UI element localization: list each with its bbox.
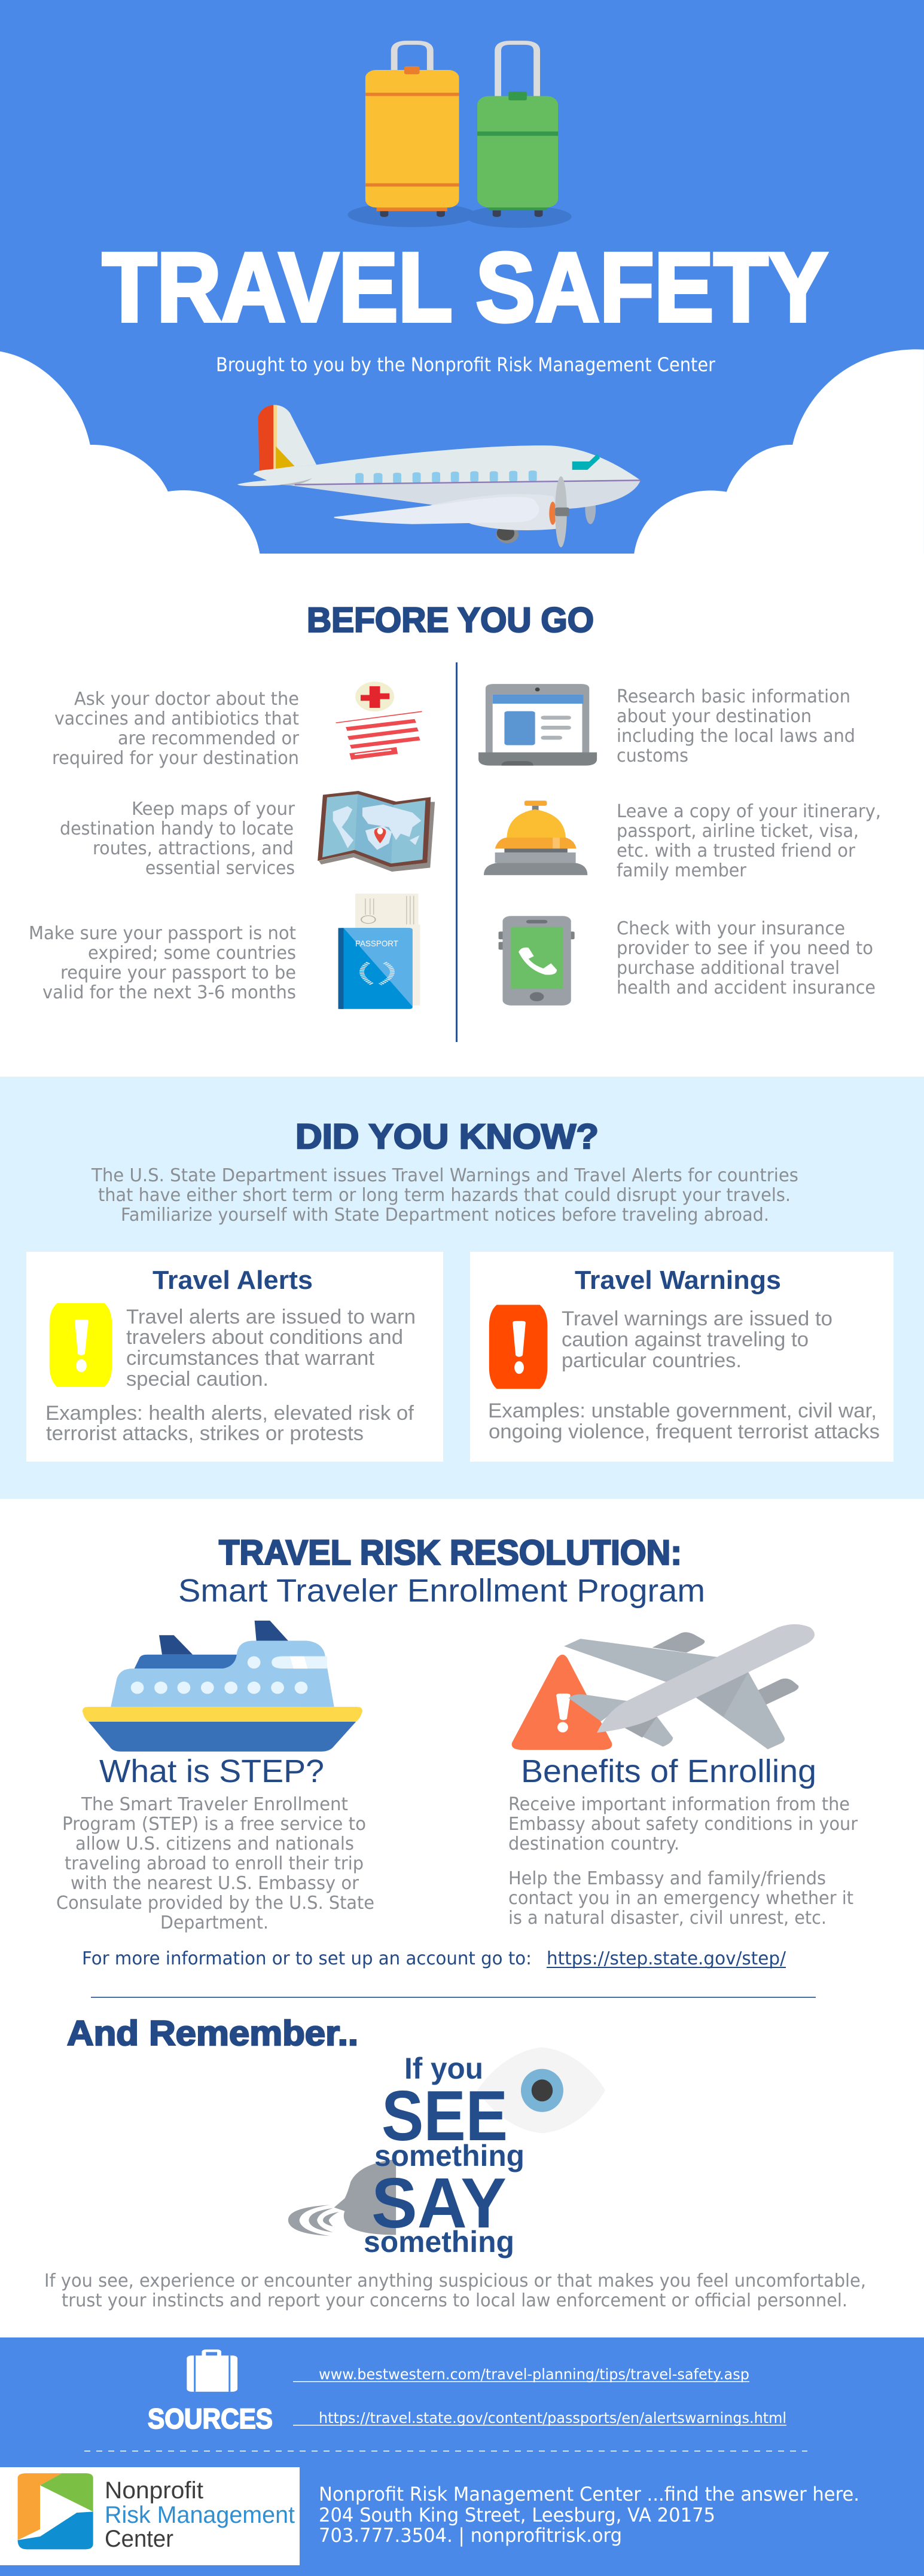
- icon: logo mark: [18, 2473, 93, 2549]
- icon: orange warning: [489, 1305, 547, 1389]
- text: passport validity: valid for the next 3-6 months: [42, 982, 296, 1003]
- slogan: SAY: [371, 2164, 507, 2243]
- slogan: [364, 2052, 524, 2259]
- text: keep maps: routes, attractions, and: [93, 838, 294, 859]
- text: passport validity: require your passport to be: [60, 962, 296, 983]
- text: benefits description: destination country.: [508, 1834, 679, 1854]
- sources heading: SOURCES: [148, 2403, 273, 2434]
- text: benefits description: is a natural disaster, civil unrest, etc.: [508, 1908, 827, 1929]
- warning examples: Examples: unstable government, civil war,: [488, 1399, 877, 1422]
- slogan: something: [374, 2139, 524, 2172]
- text: keep maps: Keep maps of your: [132, 799, 295, 820]
- intro text: Familiarize yourself with State Department notices before traveling abroad.: [121, 1205, 769, 1226]
- intro text: [91, 1165, 798, 1226]
- text: insurance: provider to see if you need to: [617, 938, 873, 959]
- logo wordmark: Nonprofit: [105, 2477, 203, 2504]
- text: research: customs: [617, 745, 688, 766]
- icon: medical record: [336, 682, 422, 760]
- slogan: something: [364, 2225, 514, 2259]
- alert description: special caution.: [126, 1368, 269, 1391]
- title: TRAVEL SAFETY: [102, 233, 828, 342]
- panel: travel risk resolution: [56, 1533, 858, 1998]
- panel: footer: [0, 2337, 924, 2576]
- icon: speaking head: [288, 2159, 396, 2236]
- text: keep maps: [60, 799, 295, 879]
- warning examples: [488, 1399, 880, 1443]
- icon: service bell: [484, 800, 587, 875]
- heading: what is step: What is STEP?: [99, 1753, 324, 1789]
- heading: DID YOU KNOW?: [295, 1117, 599, 1156]
- label: passport cover: PASSPORT: [355, 939, 398, 948]
- icon: suitcases: [347, 42, 572, 228]
- text: itinerary: Leave a copy of your itinerary,: [617, 801, 881, 822]
- text: step description: with the nearest U.S. Embassy or: [71, 1873, 359, 1894]
- panel: hero header: [0, 0, 924, 554]
- card heading: Travel Alerts: [153, 1266, 313, 1295]
- text: step description: traveling abroad to enroll their trip: [65, 1853, 364, 1874]
- icon: warning triangle and plane: [512, 1624, 815, 1750]
- text: step description: Department.: [160, 1912, 269, 1933]
- alert description: [126, 1306, 416, 1391]
- text: ask your doctor: are recommended or: [118, 728, 300, 749]
- heading: benefits: Benefits of Enrolling: [521, 1753, 816, 1789]
- icon: laptop: [478, 684, 597, 766]
- text: keep maps: essential services: [145, 858, 295, 879]
- text: benefits description: [508, 1794, 858, 1929]
- subheading: Smart Traveler Enrollment Program: [178, 1573, 705, 1609]
- text: insurance: [617, 918, 876, 998]
- warning description: particular countries.: [562, 1349, 742, 1372]
- text: ask your doctor: required for your destination: [52, 748, 299, 769]
- card heading: Travel Warnings: [575, 1266, 781, 1295]
- slogan: SEE: [382, 2076, 508, 2156]
- organization contact: Nonprofit Risk Management Center ...find the answer here.: [319, 2483, 859, 2505]
- card: travel warnings: [470, 1252, 893, 1462]
- text: ask your doctor: vaccines and antibiotics that: [54, 708, 299, 729]
- text: passport validity: Make sure your passport is not: [29, 923, 296, 944]
- icon: passport: [339, 894, 420, 1009]
- heading: BEFORE YOU GO: [307, 601, 594, 640]
- panel: before you go: [29, 601, 881, 1042]
- alert examples: Examples: health alerts, elevated risk of: [45, 1402, 414, 1425]
- text: step description: Consulate provided by the U.S. State: [56, 1893, 374, 1914]
- text: insurance: Check with your insurance: [617, 918, 845, 939]
- panel: did you know: [0, 1077, 924, 1499]
- text: passport validity: [29, 923, 296, 1003]
- text: ask your doctor: Ask your doctor about the: [74, 689, 299, 710]
- alert description: Travel alerts are issued to warn: [126, 1306, 416, 1328]
- text: research: about your destination: [617, 706, 812, 727]
- icon: map: [318, 791, 435, 872]
- warning description: Travel warnings are issued to: [562, 1307, 832, 1330]
- alert examples: terrorist attacks, strikes or protests: [46, 1422, 364, 1445]
- organization contact: 204 South King Street, Leesburg, VA 20175: [319, 2504, 715, 2526]
- logo wordmark: Risk Management: [105, 2502, 295, 2528]
- logo wordmark: Center: [105, 2526, 173, 2552]
- icon: smartphone: [499, 916, 575, 1006]
- call to action link: https://step.state.gov/step/: [547, 1948, 786, 1969]
- warning description: caution against traveling to: [562, 1328, 809, 1351]
- text: insurance: purchase additional travel: [617, 958, 840, 979]
- text: step description: [56, 1794, 374, 1933]
- heading: TRAVEL RISK RESOLUTION:: [219, 1533, 682, 1572]
- icon: eye: [477, 2048, 605, 2133]
- text: itinerary: family member: [617, 860, 747, 881]
- logo wordmark: [105, 2477, 295, 2552]
- text: step description: The Smart Traveler Enrollment: [81, 1794, 348, 1815]
- warning examples: ongoing violence, frequent terrorist attacks: [489, 1420, 880, 1443]
- alert description: travelers about conditions and: [126, 1326, 403, 1349]
- text: itinerary: etc. with a trusted friend or: [617, 841, 856, 861]
- text: keep maps: destination handy to locate: [60, 818, 294, 839]
- text: insurance: health and accident insurance: [617, 977, 876, 998]
- text: report concerns: [44, 2271, 866, 2311]
- text: report concerns: trust your instincts and report your concerns to local law enforcement or official personnel.: [62, 2290, 847, 2311]
- text: itinerary: [617, 801, 881, 881]
- text: itinerary: passport, airline ticket, visa,: [617, 821, 859, 842]
- panel: and remember: [44, 2014, 866, 2311]
- text: report concerns: If you see, experience or encounter anything suspicious or that makes you feel uncomfortable,: [44, 2271, 866, 2291]
- alert examples: [45, 1402, 414, 1445]
- text: passport validity: expired; some countries: [88, 943, 296, 964]
- heading: And Remember..: [67, 2014, 358, 2053]
- text: research: including the local laws and: [617, 726, 855, 747]
- text: benefits description: contact you in an emergency whether it: [508, 1888, 853, 1909]
- call to action link: [82, 1948, 786, 1969]
- organization contact: 703.777.3504. | nonprofitrisk.org: [319, 2524, 622, 2547]
- icon: cruise ship: [83, 1621, 362, 1752]
- organization contact: [319, 2483, 859, 2547]
- alert description: circumstances that warrant: [126, 1347, 375, 1370]
- warning description: [562, 1307, 832, 1372]
- text: research: Research basic information: [617, 686, 850, 707]
- intro text: The U.S. State Department issues Travel Warnings and Travel Alerts for countries: [91, 1165, 798, 1186]
- source links: https://travel.state.gov/content/passports/en/alertswarnings.html: [319, 2409, 786, 2427]
- source links: www.bestwestern.com/travel-planning/tips/travel-safety.asp: [319, 2366, 749, 2383]
- subtitle: Brought to you by the Nonprofit Risk Management Center: [216, 353, 716, 376]
- slogan: If you: [404, 2052, 483, 2085]
- intro text: that have either short term or long term hazards that could disrupt your travels.: [98, 1185, 791, 1206]
- icon: yellow alert: [50, 1303, 112, 1387]
- text: benefits description: Embassy about safety conditions in your: [508, 1814, 858, 1835]
- call to action link: For more information or to set up an account go to:: [82, 1948, 532, 1969]
- text: step description: Program (STEP) is a free service to: [62, 1814, 366, 1835]
- text: ask your doctor: [52, 689, 300, 769]
- icon: briefcase: [187, 2351, 237, 2392]
- icon: airplane: [237, 405, 641, 548]
- text: step description: allow U.S. citizens and nationals: [75, 1834, 354, 1854]
- text: benefits description: Receive important information from the: [508, 1794, 850, 1815]
- decoration: clouds: [0, 349, 924, 554]
- card: travel alerts: [26, 1252, 443, 1462]
- source links: [293, 2366, 786, 2427]
- text: benefits description: Help the Embassy and family/friends: [508, 1868, 826, 1889]
- logo: [0, 2467, 300, 2565]
- text: research: [617, 686, 855, 766]
